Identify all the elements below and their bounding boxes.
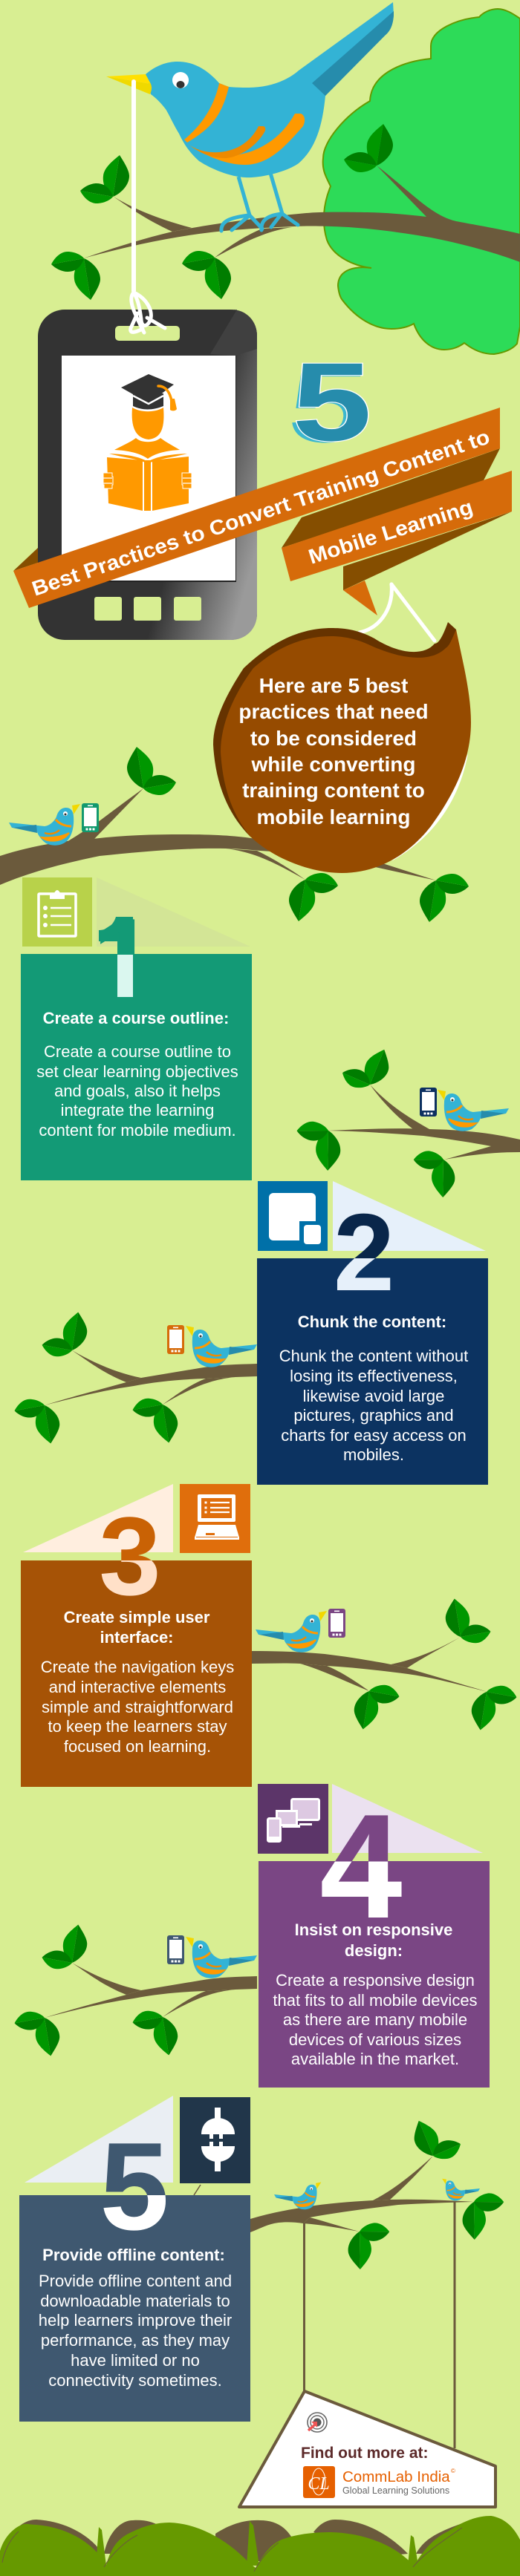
numeral 1: 1 [93,895,155,1021]
logo: CommLab India: Global Learning Solutions [342,2485,449,2496]
description: content for mobile medium. [39,1121,236,1140]
numeral 4 [322,1815,402,1918]
description [273,1971,478,2068]
section 5: offline content [19,2096,250,2422]
description [279,1347,468,1464]
description [39,2272,232,2390]
smartphone [38,310,257,640]
description: set clear learning objectives [36,1062,238,1081]
numeral 5 in heading: 5 [293,339,371,464]
description: that fits to all mobile devices [273,1991,478,2010]
numeral 2 [337,1213,391,1290]
icon: graduate reading a book [103,374,192,511]
numeral 5 [104,2143,166,2231]
description: integrate the learning [61,1101,214,1119]
description: charts for easy access on [281,1426,467,1445]
description: and interactive elements [49,1678,226,1696]
description: connectivity sometimes. [48,2371,222,2390]
speech bubble: mobile learning [257,805,410,828]
section 4: responsive design [258,1784,490,2088]
numeral 5: 5 [100,2116,169,2256]
panel: chunk the content [257,1258,488,1485]
description: focused on learning. [64,1737,211,1756]
numeral 1 [99,917,135,997]
description: help learners improve their [39,2311,232,2330]
description: and goals, also it helps [54,1082,221,1100]
second branch with bird [0,747,469,922]
description: downloadable materials to [40,2292,230,2310]
third branch with bird [291,1042,520,1199]
icon tile: multi-device [258,1784,328,1854]
panel: insist on responsive design [259,1861,490,2088]
description: available in the market. [291,2050,459,2068]
speech bubble [213,584,471,873]
description: mobiles. [343,1445,404,1464]
description: as there are many mobile [283,2010,467,2029]
description: Chunk the content without [279,1347,468,1365]
numeral 1: 1 [93,895,155,1021]
fourth branch with bird [15,1312,257,1444]
heading: Chunk the content: [298,1312,446,1331]
icon tile: chunks [258,1181,328,1251]
heading: design: [345,1941,403,1960]
ribbon banner with title: Mobile Learning [305,495,475,569]
description: likewise avoid large [303,1387,444,1405]
heading [64,1608,210,1647]
description [36,1042,238,1140]
panel: create simple user interface [21,1560,252,1787]
triangle [25,2096,173,2183]
triangle [332,1784,483,1853]
icon tile: clipboard [22,877,92,947]
logo: CommLab India: CommLab India [342,2468,450,2485]
description: devices of various sizes [289,2030,461,2049]
description: Create the navigation keys [41,1658,234,1676]
panel: provide offline content [19,2195,250,2422]
numeral 4: 4 [319,1784,403,1949]
description: pictures, graphics and [293,1406,454,1425]
section 1: course outline [21,877,252,1180]
call to action: Find out more at: [301,2445,428,2462]
hanging sign: find out more [239,2391,495,2507]
description: Provide offline content and [39,2272,232,2290]
ribbon banner with title: Best Practices to Convert Training Content to [29,425,493,601]
icon tile: laptop [180,1484,250,1553]
speech bubble: to be considered [250,727,417,750]
heading: Create simple user [64,1608,210,1627]
heading [295,1920,452,1960]
description: Create a responsive design [276,1971,475,1990]
triangle [23,1484,173,1552]
numeral 2: 2 [334,1191,394,1314]
numeral 2: 2 [334,1191,394,1314]
icon tile: plug [180,2097,250,2183]
hanging ropes [305,2202,455,2448]
numeral 5 in heading: 5 [285,341,372,465]
numeral 4: 4 [319,1784,403,1949]
description: losing its effectiveness, [290,1367,458,1385]
main bird [106,2,394,231]
description: performance, as they may [41,2331,230,2350]
description: simple and straightforward [42,1698,233,1716]
ground mounds and grass [0,2516,520,2576]
bottom branch with birds [194,2113,510,2271]
speech bubble: Here are 5 best [259,674,408,697]
logo: CommLab India [303,2466,455,2498]
speech bubble: training content to [242,779,425,802]
description [41,1658,234,1756]
speech bubble: while converting [251,753,415,776]
triangle [333,1181,486,1251]
icon: target [308,2413,327,2432]
ribbon banner with title [13,408,512,615]
heading: interface: [100,1628,174,1647]
tree foliage [323,9,520,354]
top branch with leaves [51,124,520,300]
speech bubble: practices that need [238,700,429,723]
panel: create a course outline [21,954,252,1180]
numeral 3: 3 [99,1494,161,1618]
heading: Provide offline content: [42,2246,225,2264]
sixth branch with bird [15,1924,257,2056]
numeral 3 [101,1517,157,1596]
description: Create a course outline to [44,1042,231,1061]
numeral 5: 5 [100,2116,169,2256]
description: have limited or no [71,2351,200,2370]
numeral 3: 3 [99,1494,161,1618]
heading: Insist on responsive [295,1920,452,1939]
section 2: chunk the content [257,1181,488,1485]
string from beak to phone [131,82,165,333]
description: to keep the learners stay [48,1717,227,1736]
heading: Create a course outline: [43,1009,229,1027]
logo: CommLab India: © [451,2468,455,2474]
fifth branch with bird [252,1598,516,1730]
triangle [97,877,250,947]
section 3: simple user interface [21,1484,252,1787]
logo: CommLab India: CL [308,2474,330,2494]
